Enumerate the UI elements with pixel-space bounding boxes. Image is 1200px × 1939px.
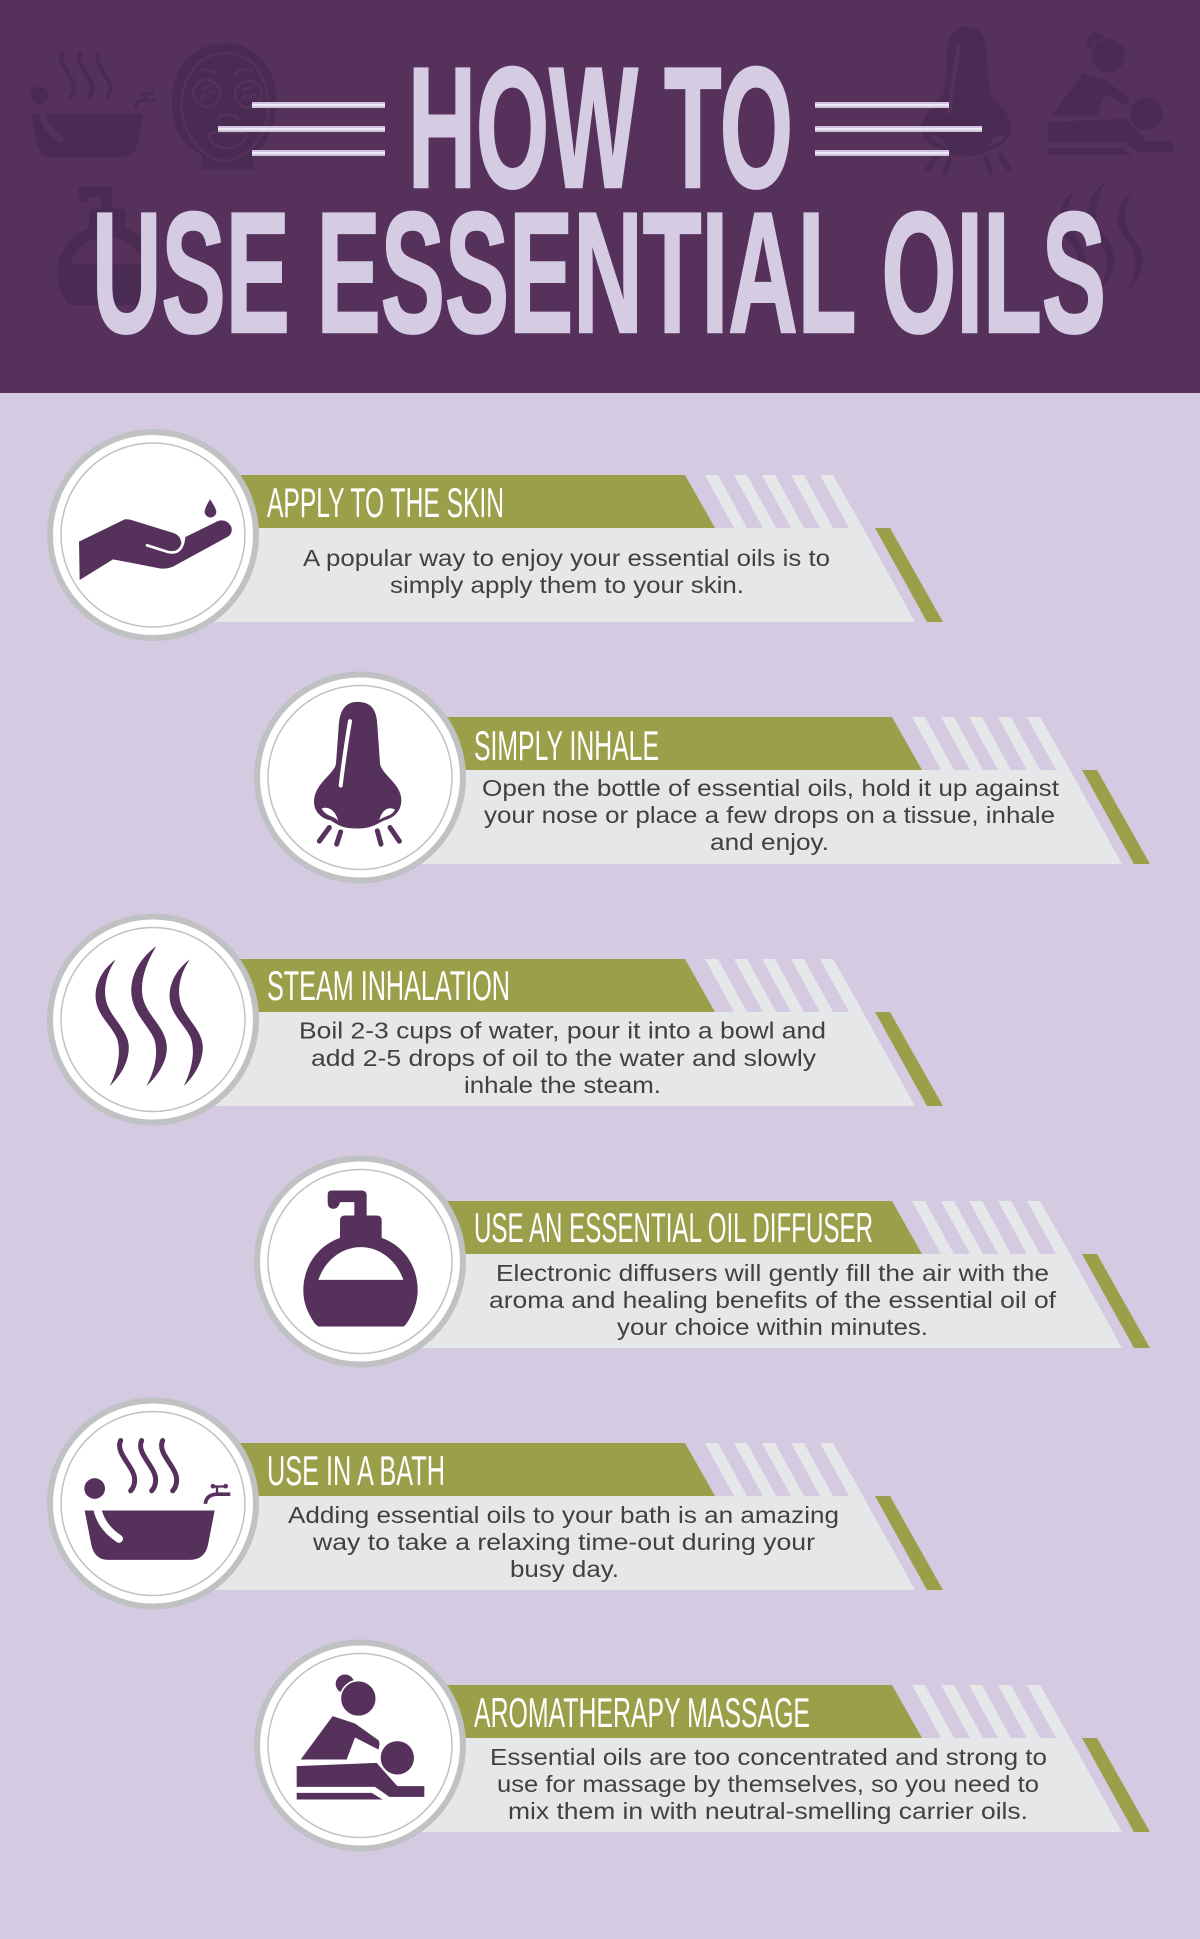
background icon: nose (922, 27, 1011, 172)
heading: STEAM INHALATION (267, 962, 510, 1009)
description: Adding essential oils to your bath is an amazing (288, 1502, 839, 1528)
description (288, 1502, 839, 1582)
ribbon (397, 717, 1150, 864)
background icon: steam (1060, 180, 1143, 289)
icon: bath (50, 1400, 256, 1606)
description: way to take a relaxing time-out during your (312, 1529, 815, 1555)
description: Electronic diffusers will gently fill the air with the (496, 1260, 1049, 1286)
description (482, 775, 1060, 855)
ribbon (190, 475, 943, 622)
description: and enjoy. (710, 829, 829, 855)
background icon: face mask (172, 43, 277, 170)
background icon: bath (31, 54, 157, 157)
description: Open the bottle of essential oils, hold it up against (482, 775, 1060, 801)
description (299, 1018, 826, 1098)
icon: steam (50, 916, 256, 1122)
icon: hand with drop (50, 432, 256, 638)
panel: steam inhalation (50, 916, 943, 1122)
description: aroma and healing benefits of the essential oil of (489, 1287, 1057, 1313)
background icon: bottle (57, 187, 157, 305)
title (92, 32, 1106, 369)
description: A popular way to enjoy your essential oils is to (303, 545, 830, 571)
description: inhale the steam. (464, 1072, 661, 1098)
heading: USE AN ESSENTIAL OIL DIFFUSER (474, 1204, 873, 1251)
heading: APPLY TO THE SKIN (267, 479, 504, 526)
ribbon (397, 1685, 1150, 1832)
heading: USE IN A BATH (267, 1447, 445, 1494)
description (489, 1260, 1057, 1340)
ribbon (190, 1443, 943, 1590)
description: your choice within minutes. (617, 1314, 928, 1340)
description (490, 1744, 1047, 1824)
panel: use in a bath (50, 1400, 943, 1606)
icon: bottle (257, 1158, 463, 1364)
ribbon (397, 1201, 1150, 1348)
description: your nose or place a few drops on a tissue, inhale (484, 802, 1055, 828)
description (303, 545, 830, 598)
background icon: massage (1048, 32, 1173, 155)
ribbon (190, 959, 943, 1106)
description: busy day. (510, 1556, 619, 1582)
description: Essential oils are too concentrated and strong to (490, 1744, 1047, 1770)
icon: nose (257, 674, 463, 880)
description: add 2-5 drops of oil to the water and slowly (311, 1045, 817, 1071)
heading: AROMATHERAPY MASSAGE (474, 1689, 810, 1736)
description: simply apply them to your skin. (390, 572, 744, 598)
icon: massage (257, 1642, 463, 1848)
panel: simply inhale (257, 674, 1150, 880)
description: use for massage by themselves, so you need to (497, 1771, 1039, 1797)
header banner (0, 0, 1200, 393)
title: HOW TO (408, 32, 793, 224)
description: Boil 2-3 cups of water, pour it into a bowl and (299, 1018, 826, 1044)
panel: apply to the skin (50, 432, 943, 638)
description: mix them in with neutral-smelling carrier oils. (508, 1798, 1028, 1824)
panel: use an essential oil diffuser (257, 1158, 1150, 1364)
panel: aromatherapy massage (257, 1642, 1150, 1848)
title accent lines (218, 102, 982, 156)
heading: SIMPLY INHALE (474, 722, 659, 769)
